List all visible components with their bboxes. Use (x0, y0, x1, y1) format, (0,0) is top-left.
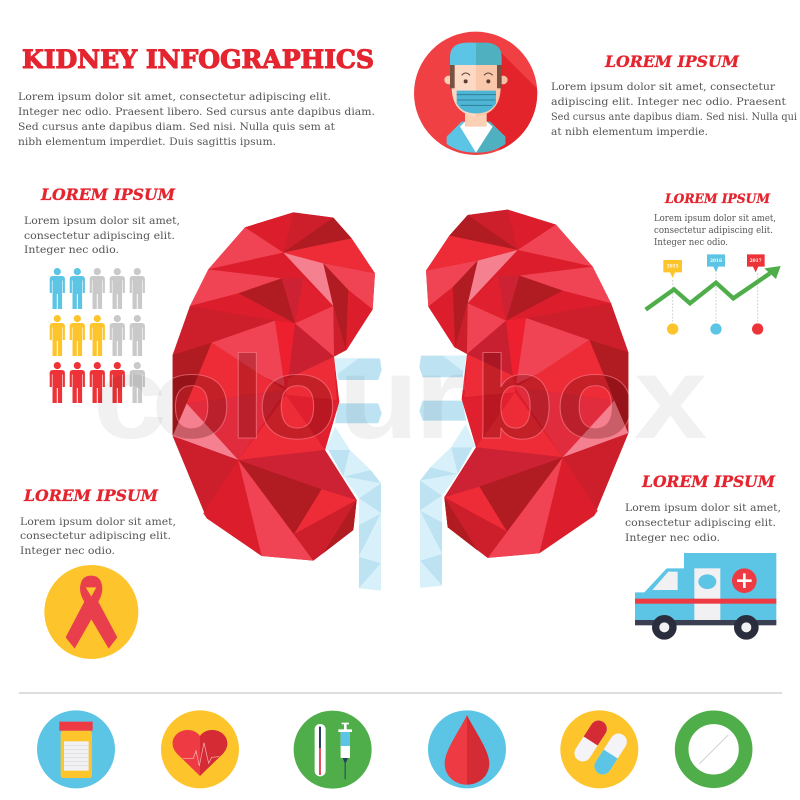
intro text block: Sed cursus ante dapibus diam. Sed nisi. Nulla quis sem at (18, 121, 336, 133)
text block: right middle: Lorem ipsum dolor sit amet, (654, 214, 776, 224)
icon: green ring tablet (682, 717, 746, 781)
text block: top right: adipiscing elit. Integer nec odio. Praesent (551, 96, 787, 108)
heading: top right: LOREM IPSUM (604, 52, 740, 71)
text block: lower left (20, 516, 176, 557)
text block: lower left: Lorem ipsum dolor sit amet, (20, 516, 176, 528)
title: KIDNEY INFOGRAPHICS (22, 45, 374, 74)
pictogram: people rows (50, 268, 145, 403)
text block: lower right: consectetur adipiscing elit. (625, 517, 776, 529)
text block: top right: Lorem ipsum dolor sit amet, consectetur (551, 81, 776, 93)
marker 2016: 2016 (710, 259, 722, 264)
heading: lower right: LOREM IPSUM (641, 472, 776, 491)
icon: capsules (560, 710, 638, 788)
text block: right middle: consectetur adipiscing elit. (654, 226, 773, 236)
intro text block: Lorem ipsum dolor sit amet, consectetur adipiscing elit. (18, 91, 331, 103)
text block: left middle: consectetur adipiscing elit. (24, 230, 175, 242)
heading: lower left: LOREM IPSUM (23, 486, 159, 505)
icon: doctor with mask (414, 32, 537, 155)
heading: left middle: LOREM IPSUM (40, 185, 176, 204)
icon: ambulance (635, 553, 776, 640)
chart: rising arrow timeline (646, 254, 781, 335)
text block: right middle (654, 214, 776, 248)
marker 2017: 2017 (750, 259, 762, 264)
right ureter (419, 356, 476, 588)
right kidney (426, 210, 628, 558)
text block: left middle: Integer nec odio. (24, 244, 119, 256)
watermark: colourbox (93, 332, 707, 463)
text block: right middle: Integer nec odio. (654, 238, 728, 248)
intro text block (18, 91, 375, 148)
text block: top right (551, 81, 798, 138)
intro text block: Integer nec odio. Praesent libero. Sed cursus ante dapibus diam. (18, 106, 375, 118)
text block: lower right: Integer nec odio. (625, 532, 720, 544)
text block: lower right (625, 502, 781, 544)
text block: left middle: Lorem ipsum dolor sit amet, (24, 215, 180, 227)
left ureter (325, 358, 382, 591)
intro text block: nibh elementum imperdiet. Duis sagittis ipsum. (18, 136, 276, 148)
icon: thermometer and syringe (294, 711, 372, 789)
icon: pill bottle (37, 710, 115, 788)
text block: left middle (24, 215, 180, 256)
icon: heart with pulse (161, 710, 239, 788)
watermark: colourbox (93, 332, 707, 463)
text block: lower left: consectetur adipiscing elit. (20, 530, 171, 542)
text block: lower left: Integer nec odio. (20, 545, 115, 557)
heading: right middle: LOREM IPSUM (664, 192, 771, 207)
text block: top right: at nibh elementum imperdie. (551, 126, 708, 138)
marker 2015: 2015 (667, 265, 679, 270)
left kidney (173, 212, 375, 561)
icon: awareness ribbon (44, 565, 138, 659)
text block: lower right: Lorem ipsum dolor sit amet, (625, 502, 781, 514)
icon: blood drop (428, 710, 506, 788)
watermark (98, 352, 706, 440)
